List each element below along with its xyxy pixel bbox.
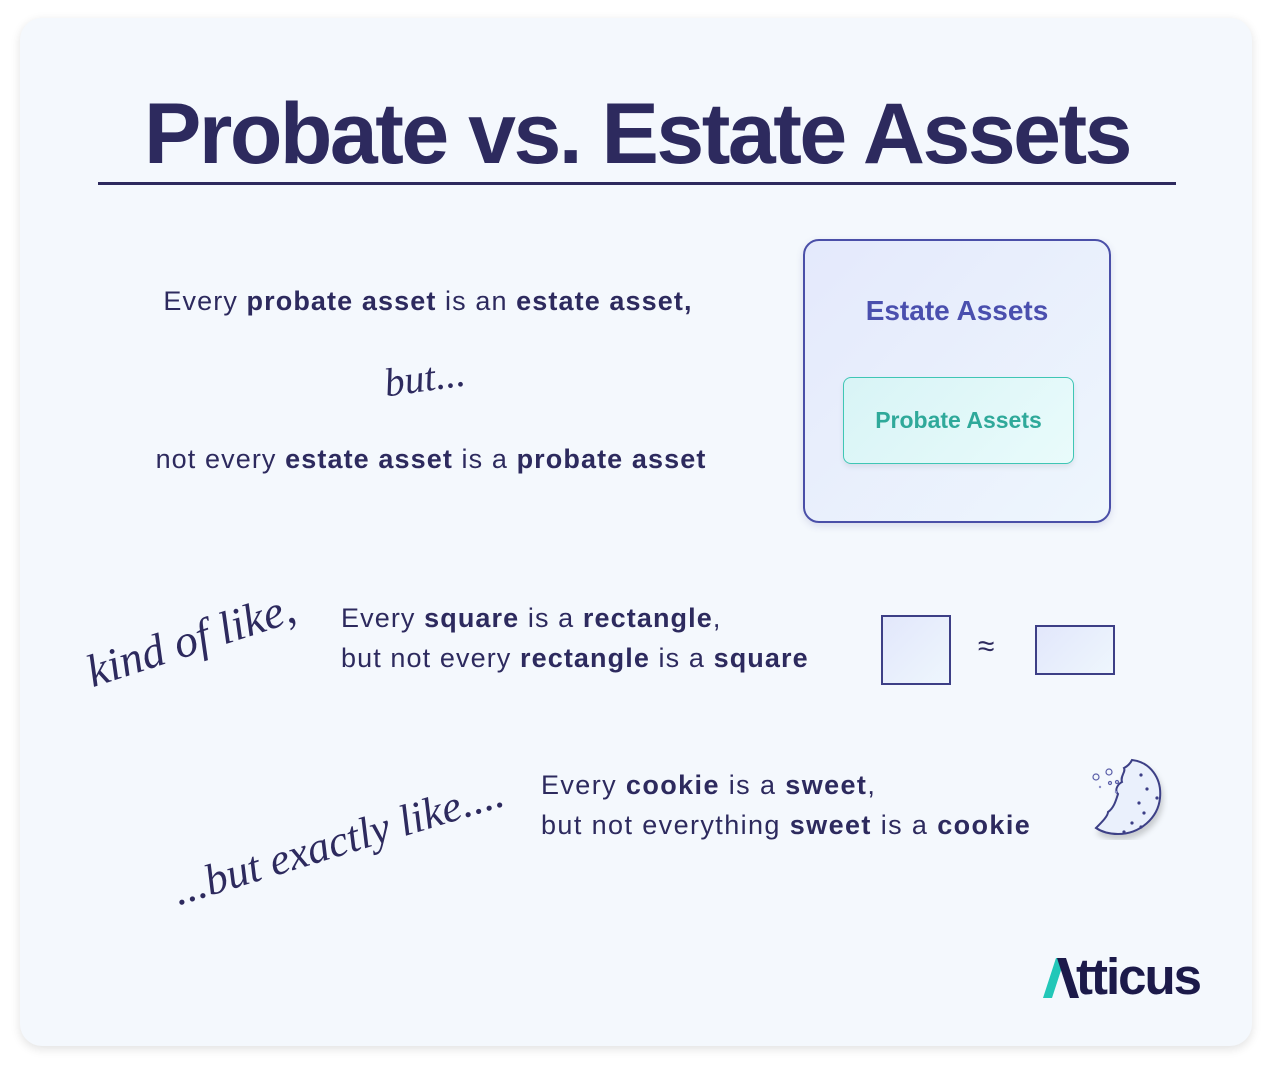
approx symbol: ≈ — [978, 630, 994, 663]
label: Estate Assets: Estate Assets — [866, 295, 1048, 326]
script: kind of like: kind of like, — [80, 582, 301, 697]
script: but...: but... — [381, 350, 468, 405]
text: not every estate asset: not every estate asset is a probate asset — [156, 444, 706, 474]
icon: rectangle — [1035, 625, 1115, 675]
text: square/rectangle: but not every rectangle is a square — [341, 643, 809, 673]
title: Probate vs. Estate Assets — [144, 86, 1130, 182]
inner box: probate assets — [843, 377, 1074, 464]
logo: Atticus: tticus — [1076, 948, 1200, 1005]
inner box: probate assets: Probate Assets — [875, 407, 1042, 433]
text: cookie/sweet — [541, 770, 1031, 840]
icon: square — [881, 615, 951, 685]
text: every probate asset: Every probate asset is an estate asset, — [163, 286, 693, 316]
title underline — [98, 182, 1176, 185]
text: square/rectangle — [341, 603, 809, 673]
text: cookie/sweet: but not everything sweet is a cookie — [541, 810, 1031, 840]
text: cookie/sweet: Every cookie is a sweet, — [541, 770, 876, 800]
diagram: estate assets box — [803, 239, 1111, 523]
script: but exactly like: ...but exactly like.... — [167, 768, 509, 915]
text: square/rectangle: Every square is a rectangle, — [341, 603, 721, 633]
icon: cookie — [1092, 758, 1166, 840]
